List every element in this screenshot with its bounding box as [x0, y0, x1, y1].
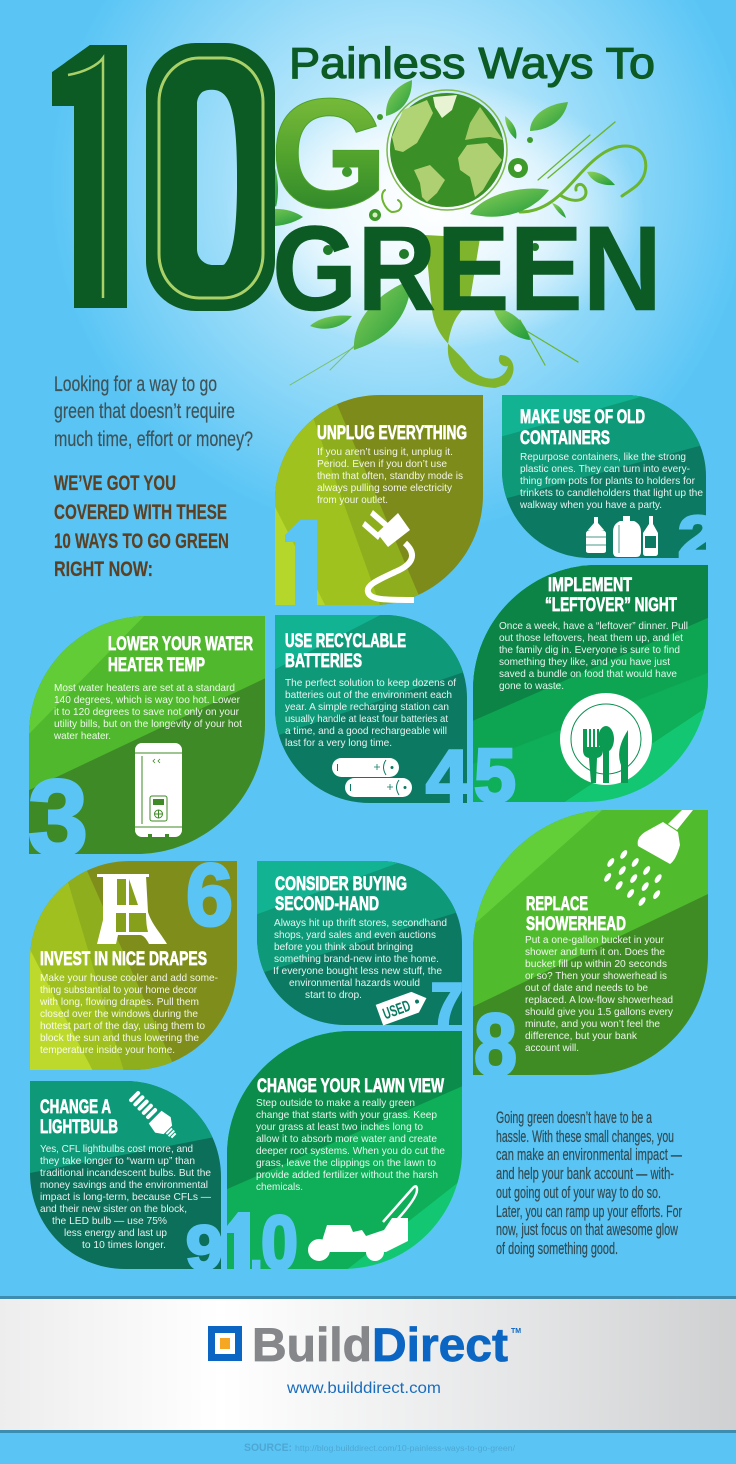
- logo: TM: [511, 1328, 521, 1335]
- heading: [526, 894, 626, 935]
- heading: [520, 407, 645, 449]
- heading: [545, 575, 677, 616]
- body text: impact is long-term, because CFLs —: [40, 1191, 211, 1203]
- source line: [244, 1442, 516, 1454]
- body text: Yes, CFL lightbulbs cost more, and: [40, 1143, 193, 1155]
- word: GO: G: [270, 67, 388, 241]
- panel 6: invest in nice drapes: [30, 861, 237, 1070]
- body text: water heater.: [53, 730, 111, 742]
- body text: less energy and last up: [64, 1227, 167, 1239]
- body text: shower and turn it on. Does the: [525, 946, 665, 958]
- body text: plastic ones. They can turn into every-: [520, 463, 690, 475]
- heading: SECOND-HAND: [275, 894, 379, 915]
- body text: something they like, and you have just: [499, 656, 670, 668]
- heading: USE RECYCLABLE: [285, 631, 406, 652]
- body text: Put a one-gallon bucket in your: [525, 934, 664, 946]
- heading: UNPLUG EVERYTHING: [317, 423, 467, 444]
- body text: 140 degrees, which is way too hot. Lower: [54, 694, 240, 706]
- intro subheading: 10 WAYS TO GO GREEN: [54, 530, 229, 553]
- body text: account will.: [525, 1042, 579, 1054]
- body text: grass, leave the clippings on the lawn to: [256, 1157, 436, 1169]
- numeral 0: [146, 43, 275, 311]
- body text: Period. Even if you don’t use: [317, 458, 447, 470]
- body text: last for a very long time.: [285, 737, 392, 749]
- intro text: [54, 373, 253, 451]
- closing text: [496, 1108, 682, 1258]
- body text: If everyone bought less new stuff, the: [273, 965, 442, 977]
- body text: Repurpose containers, like the strong: [520, 451, 686, 463]
- number 9: 9: [186, 1214, 223, 1283]
- body text: money savings and the environmental: [40, 1179, 208, 1191]
- panel 5: leftover night: [473, 565, 708, 802]
- number 6: 6: [186, 845, 233, 944]
- source line: http://blog.builddirect.com/10-painless-ways-to-go-green/: [295, 1443, 516, 1453]
- body text: usually handle at least four batteries at: [285, 713, 448, 725]
- body text: thing from pots for plants to holders for: [520, 475, 695, 487]
- body text: Always hit up thrift stores, secondhand: [274, 917, 447, 929]
- body text: [53, 682, 242, 742]
- intro subheading: RIGHT NOW:: [54, 558, 153, 581]
- heading: BATTERIES: [285, 651, 362, 672]
- body text: out those leftovers, heat them up, and let: [499, 632, 683, 644]
- intro subheading: COVERED WITH THESE: [54, 501, 227, 524]
- body text: [317, 446, 463, 506]
- source line: SOURCE:: [244, 1442, 292, 1454]
- body text: and their new sister on the block,: [40, 1203, 187, 1215]
- heading: [285, 631, 406, 672]
- body text: utility bills, but on the longevity of your hot: [54, 718, 242, 730]
- footer band: BuildDirect: [0, 1296, 736, 1433]
- body text: [285, 677, 456, 749]
- body text: always pulling some electricity: [317, 482, 453, 494]
- title line: Painless Ways To: Painless Ways To: [289, 39, 655, 88]
- panel 4: recyclable batteries: [275, 615, 467, 803]
- body text: provide added fertilizer without the harsh: [256, 1169, 438, 1181]
- body text: [39, 972, 218, 1056]
- intro subheading: WE’VE GOT YOU: [54, 472, 176, 495]
- body text: something brand-new into the home.: [274, 953, 439, 965]
- heading: LIGHTBULB: [40, 1117, 118, 1138]
- heading: CONTAINERS: [520, 428, 610, 449]
- body text: walkway when you have a party.: [519, 499, 662, 511]
- panel 10: change your lawn view: [227, 1031, 462, 1269]
- title illustration: Go Green: [225, 67, 662, 388]
- body text: it to 120 degrees to save not only on your: [54, 706, 239, 718]
- intro text: much time, effort or money?: [54, 428, 253, 451]
- vines right: [290, 122, 646, 385]
- numeral 1: [52, 45, 127, 308]
- icon: plate and cutlery: [560, 693, 652, 785]
- heading: MAKE USE OF OLD: [520, 407, 645, 428]
- heading: REPLACE: [526, 894, 588, 915]
- number 1: [285, 520, 317, 605]
- icon: bottles: [586, 516, 658, 557]
- body text: [256, 1097, 445, 1193]
- body text: the LED bulb — use 75%: [52, 1215, 167, 1227]
- body text: the family dig in. Everyone is sure to find: [499, 644, 680, 656]
- closing text: of doing something good.: [496, 1239, 618, 1258]
- body text: environmental hazards would: [289, 977, 420, 989]
- panel 9: change a lightbulb: [30, 1081, 221, 1269]
- body text: your grass at least two inches long to: [256, 1121, 423, 1133]
- number 2: 2: [678, 504, 718, 571]
- body text: The perfect solution to keep dozens of: [285, 677, 456, 689]
- icon: CFL lightbulb: [125, 1087, 182, 1144]
- body text: with long, flowing drapes. Pull them: [39, 996, 199, 1008]
- body text: change that starts with your grass. Keep: [256, 1109, 437, 1121]
- panel 8: replace showerhead: [473, 810, 708, 1075]
- body text: traditional incandescent bulbs. But the: [40, 1167, 211, 1179]
- title: big numeral 10: [52, 43, 275, 311]
- icon: used tag: USED: [381, 998, 413, 1023]
- intro text: Looking for a way to go: [54, 373, 217, 396]
- body text: out of date and needs to be: [525, 982, 648, 994]
- body text: [499, 620, 688, 692]
- body text: trinkets to candleholders that light up the: [520, 487, 703, 499]
- heading: “LEFTOVER” NIGHT: [545, 595, 677, 616]
- body text: year. A simple recharging station can: [285, 701, 449, 713]
- number 10: [227, 1212, 297, 1269]
- icon: batteries: [332, 758, 412, 797]
- body text: before you think about bringing: [274, 941, 413, 953]
- logo: BuildDirect: [252, 1318, 508, 1371]
- heading: CHANGE YOUR LAWN VIEW: [257, 1076, 444, 1097]
- body text: thing substantial to your home decor: [40, 984, 197, 996]
- droplets: [323, 114, 539, 259]
- body text: [273, 917, 447, 1001]
- icon: showerhead: [598, 810, 693, 912]
- intro subheading: [54, 472, 229, 581]
- intro text: green that doesn’t require: [54, 400, 235, 423]
- body text: Make your house cooler and add some-: [40, 972, 218, 984]
- body text: should give you 1.5 gallons every: [525, 1006, 674, 1018]
- panel 1: unplug everything: [275, 395, 483, 605]
- number 5: 5: [474, 734, 516, 819]
- heading: [275, 874, 407, 915]
- number 4: 4: [426, 735, 469, 820]
- body text: batteries out of the environment each: [285, 689, 452, 701]
- number 8: 8: [474, 995, 517, 1094]
- number 3: 3: [28, 757, 88, 878]
- body text: [519, 451, 703, 511]
- body text: [40, 1143, 211, 1251]
- panel 2: make use of old containers: [502, 395, 706, 558]
- body text: bucket fill up within 20 seconds: [525, 958, 667, 970]
- body text: Once a week, have a “leftover” dinner. Pull: [499, 620, 688, 632]
- body text: allow it to absorb more water and create: [256, 1133, 437, 1145]
- body text: they take longer to “warm up” than: [40, 1155, 195, 1167]
- heading: HEATER TEMP: [108, 655, 205, 676]
- heading: LOWER YOUR WATER: [108, 634, 253, 655]
- body text: difference, but your bank: [525, 1030, 638, 1042]
- heading: [108, 634, 253, 676]
- body text: deeper root systems. When you do cut the: [256, 1145, 445, 1157]
- panel 7: consider buying second-hand: [257, 861, 462, 1026]
- body text: or so? Then your showerhead is: [525, 970, 667, 982]
- leaves: [244, 80, 615, 350]
- icon: drapes: [97, 874, 167, 944]
- body text: gone to waste.: [499, 680, 564, 692]
- globe: [387, 90, 507, 210]
- body text: closed over the windows during the: [40, 1008, 198, 1020]
- body text: start to drop.: [305, 989, 362, 1001]
- heading: SHOWERHEAD: [526, 914, 626, 935]
- body text: from your outlet.: [317, 494, 388, 506]
- body text: [525, 934, 674, 1054]
- icon: plug: [362, 510, 414, 600]
- body text: to 10 times longer.: [82, 1239, 166, 1251]
- body text: chemicals.: [256, 1181, 303, 1193]
- number 7: 7: [431, 971, 463, 1038]
- word: GREEN: GREEN: [272, 200, 662, 336]
- heading: INVEST IN NICE DRAPES: [40, 949, 207, 970]
- body text: replaced. A low-flow showerhead: [525, 994, 673, 1006]
- body text: shops, yard sales and even auctions: [274, 929, 436, 941]
- panel 3: lower water heater temp: [29, 616, 265, 854]
- body text: Most water heaters are set at a standard: [54, 682, 235, 694]
- body text: temperature inside your home.: [40, 1044, 175, 1056]
- website url: www.builddirect.com: [286, 1380, 441, 1397]
- body text: Step outside to make a really green: [256, 1097, 415, 1109]
- body text: a time, and a good rechargeable will: [285, 725, 447, 737]
- lime splatter behind GREEN: [425, 235, 514, 388]
- body text: minute, and you won’t feel the: [525, 1018, 660, 1030]
- body text: them that often, standby mode is: [317, 470, 463, 482]
- heading: [40, 1097, 118, 1138]
- heading: CONSIDER BUYING: [275, 874, 407, 895]
- body text: saved a bundle on food that would have: [499, 668, 677, 680]
- number 10: 10: [224, 1201, 298, 1286]
- number 1: 1: [276, 497, 336, 631]
- body text: hottest part of the day, using them to: [40, 1020, 205, 1032]
- body text: If you aren’t using it, unplug it.: [317, 446, 453, 458]
- icon: water heater: [135, 743, 182, 839]
- icon: lawn mower: [308, 1186, 417, 1261]
- heading: CHANGE A: [40, 1097, 111, 1118]
- heading: IMPLEMENT: [548, 575, 632, 596]
- body text: block the sun and thus lowering the: [40, 1032, 199, 1044]
